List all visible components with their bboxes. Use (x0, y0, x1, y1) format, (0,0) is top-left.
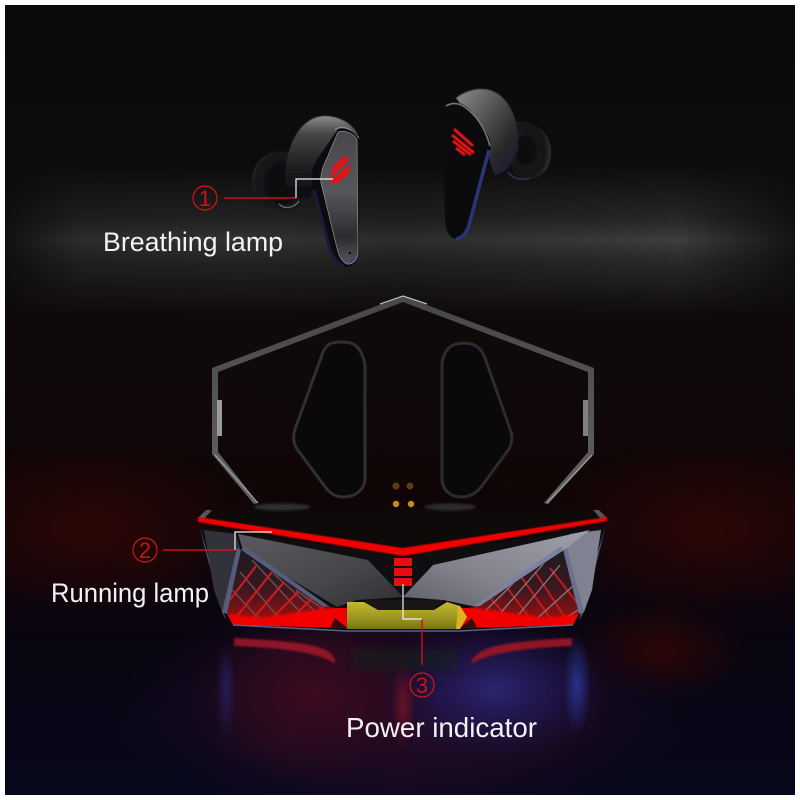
left earbud slot (294, 342, 365, 497)
yellow power section (347, 602, 467, 629)
callout 3 number: 3 (416, 673, 428, 698)
right lattice vent (460, 551, 579, 628)
callout 3 (403, 584, 434, 698)
base top plate (198, 510, 607, 555)
left dome (285, 116, 358, 198)
left earbud (252, 116, 359, 267)
right lamp logo (452, 129, 474, 155)
base bottom edge (233, 625, 573, 631)
left lamp logo (330, 157, 350, 183)
right dome (456, 89, 518, 175)
base body (200, 527, 605, 630)
power indicator bars (394, 558, 412, 586)
label: breathing lamp: Breathing lamp (103, 227, 283, 257)
right eartip (509, 122, 551, 179)
charging contacts (392, 482, 414, 507)
callout 1 (193, 179, 333, 211)
right earbud slot (442, 343, 512, 497)
case base (198, 504, 607, 631)
left grey panel (238, 534, 403, 607)
callout 1 number: 1 (199, 186, 211, 211)
left eartip (252, 151, 304, 209)
reflection (234, 638, 572, 670)
label: running lamp: Running lamp (51, 578, 209, 608)
label: power indicator: Power indicator (346, 712, 537, 743)
right earbud (443, 89, 551, 239)
left stem (312, 128, 359, 267)
callout 2 (133, 532, 272, 563)
running lamp strip (198, 517, 607, 556)
left lattice vent (227, 551, 347, 628)
right grey panel (403, 530, 590, 607)
case lid (212, 296, 594, 507)
right stem (443, 103, 491, 239)
lid hinge clips (217, 400, 222, 436)
lid frame (212, 296, 594, 504)
callout 2 number: 2 (139, 538, 151, 563)
